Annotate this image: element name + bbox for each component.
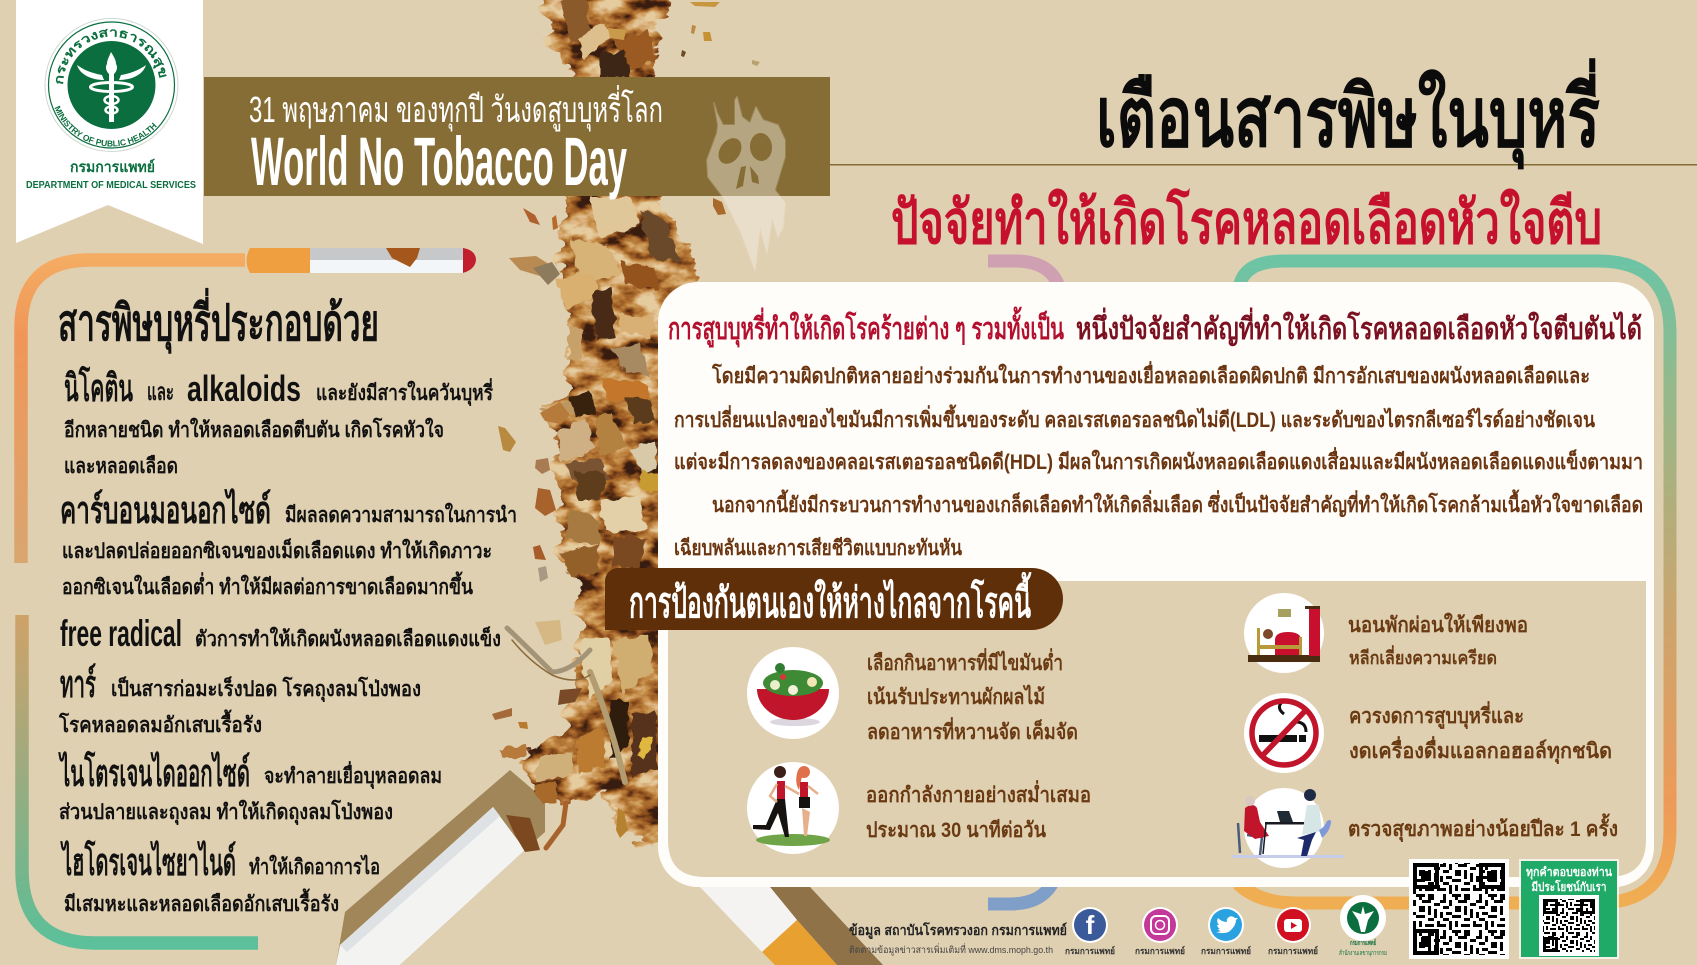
tip text: diet: เลือกกินอาหารที่มีไขมันต่ำ (867, 647, 1063, 675)
item: carbon monoxide: คาร์บอนมอนอกไซด์ (60, 488, 271, 532)
icon: ghost skull smoke (707, 97, 785, 270)
item: nicotine (64, 365, 494, 478)
item: free radical: ตัวการทำให้เกิดผนังหลอดเลือดแดงแข็ง (195, 625, 501, 651)
panel: heart disease explanation card (658, 282, 1654, 887)
icon: youtube: กรมการแพทย์ (1268, 945, 1318, 956)
tip text: exercise (866, 779, 1091, 842)
icon: department seal (1339, 895, 1387, 957)
scattered tobacco flakes (492, 2, 760, 852)
icon: facebook: กรมการแพทย์ (1065, 945, 1115, 956)
icon: instagram (1135, 907, 1185, 956)
source credit: ข้อมูล สถาบันโรคทรวงอก กรมการแพทย์ (849, 921, 1067, 939)
QR code: feedback panel: มีประโยชน์กับเรา (1532, 879, 1606, 894)
ministry emblem: MINISTRY OF PUBLIC HEALTH (54, 106, 157, 146)
tip: quit smoking (1244, 693, 1612, 773)
logo ribbon: DEPARTMENT OF MEDICAL SERVICES (26, 180, 196, 191)
header rule (830, 164, 1697, 166)
item: hydrogen cyanide: ไฮโดรเจนไซยาไนด์ (60, 839, 236, 884)
tip text: health check: ตรวจสุขภาพอย่างน้อยปีละ 1 ครั้ง (1348, 813, 1618, 843)
item: hydrogen cyanide: มีเสมหะและหลอดเลือดอักเสบเรื้อรัง (64, 888, 339, 916)
tip text: quit smoking: งดเครื่องดื่มแอลกอฮอล์ทุกชนิด (1349, 735, 1612, 765)
item: nicotine: และหลอดเลือด (64, 454, 178, 478)
card heading (668, 306, 1642, 348)
tip text: quit smoking (1349, 700, 1612, 765)
icon: no smoking (1244, 693, 1324, 773)
prevention heading pill: การป้องกันตนเองให้ห่างไกลจากโรคนี้ (629, 571, 1032, 626)
item: nicotine: นิโคติน (64, 365, 133, 410)
icon: department seal: สำนักงานเลขานุการกรม (1339, 949, 1387, 957)
left panel text (58, 288, 517, 916)
item: hydrogen cyanide: ทำให้เกิดอาการไอ (249, 854, 380, 879)
icon: doctor consultation (1232, 788, 1344, 868)
banner English title: World No Tobacco Day (251, 123, 627, 200)
icon: sleeping in bed (1244, 593, 1324, 673)
icon: runners (747, 762, 839, 854)
QR code: main (1409, 859, 1509, 959)
department name: กรมการแพทย์ (70, 158, 155, 176)
item: nicotine: และยังมีสารในควันบุหรี่ (316, 377, 494, 407)
tip text: exercise: ออกกำลังกายอย่างสม่ำเสมอ (866, 779, 1091, 807)
item: nitrogen dioxide: ไนโตรเจนไดออกไซด์ (58, 750, 250, 795)
icon: salad bowl (747, 647, 839, 739)
source credit: ติดตามข้อมูลข่าวสารเพิ่มเติมที่ www.dms.moph.go.th (849, 943, 1053, 956)
icon: instagram: กรมการแพทย์ (1135, 945, 1185, 956)
icon: facebook (1065, 907, 1115, 956)
lower-left cigarette (336, 770, 545, 965)
source credit (849, 921, 1067, 956)
tobacco stems (507, 628, 625, 848)
item: nicotine: และ (147, 379, 174, 406)
left panel outline (21, 260, 258, 943)
tip text: diet (867, 647, 1078, 744)
left panel heading: สารพิษบุหรี่ประกอบด้วย (58, 288, 379, 354)
item: nitrogen dioxide: ส่วนปลายและถุงลม ทำให้เกิดถุงลมโป่งพอง (59, 799, 393, 826)
icon: facebook: f (1086, 910, 1095, 940)
QR code: feedback panel: ทุกคำตอบของท่าน (1526, 865, 1613, 880)
icon: youtube (1268, 907, 1318, 956)
top cigarette (246, 248, 476, 273)
ministry emblem (44, 18, 178, 152)
card body text: โดยมีความผิดปกติหลายอย่างร่วมกันในการทำงานของเยื่อหลอดเลือดผิดปกติ มีการอักเสบของผนังหลอดเลือดและ (711, 360, 1590, 388)
tip text: rest: หลีกเลี่ยงความเครียด (1349, 645, 1497, 668)
item: nicotine: อีกหลายชนิด ทำให้หลอดเลือดตีบตัน เกิดโรคหัวใจ (64, 417, 444, 442)
card body text: เฉียบพลันและการเสียชีวิตแบบกะทันหัน (674, 536, 963, 560)
item: carbon monoxide: ออกซิเจนในเลือดต่ำ ทำให้มีผลต่อการขาดเลือดมากขึ้น (62, 571, 474, 599)
tip: rest (1244, 593, 1528, 673)
tip: health check (1232, 788, 1618, 868)
tip text: diet: เน้นรับประทานผักผลไม้ (867, 684, 1045, 709)
item: carbon monoxide: และปลดปล่อยออกซิเจนของเม็ดเลือดแดง ทำให้เกิดภาวะ (62, 537, 492, 563)
item: hydrogen cyanide (60, 839, 380, 916)
item: tar: ทาร์ (60, 663, 96, 706)
tip text: rest (1348, 612, 1528, 668)
item: tar (58, 663, 421, 737)
icon: department seal: กรมการแพทย์ (1350, 938, 1376, 947)
item: carbon monoxide: มีผลลดความสามารถในการนำ (285, 502, 517, 527)
lower-right cigarette with filter (700, 887, 883, 965)
item: free radical: free radical (60, 613, 182, 654)
header banner (204, 77, 830, 200)
tip: exercise (747, 762, 1091, 854)
item: nitrogen dioxide (58, 750, 442, 826)
banner date line: 31 พฤษภาคม ของทุกปี วันงดสูบบุหรี่โลก (249, 85, 663, 132)
tip text: diet: ลดอาหารที่หวานจัด เค็มจัด (867, 716, 1078, 744)
item: tar: เป็นสารก่อมะเร็งปอด โรคถุงลมโป่งพอง (111, 675, 421, 703)
icon: twitter (1201, 907, 1251, 956)
logo ribbon (16, 0, 203, 244)
card heading: การสูบบุหรี่ทำให้เกิดโรคร้ายต่าง ๆ รวมทั้งเป็น (668, 306, 1064, 348)
tip text: rest: นอนพักผ่อนให้เพียงพอ (1348, 612, 1528, 637)
prevention heading pill (605, 568, 1063, 630)
social media icons (1065, 895, 1387, 957)
tip: healthy diet (747, 647, 1078, 744)
card body text (674, 360, 1643, 560)
QR code: feedback panel (1519, 859, 1619, 959)
tobacco leaves column (492, 0, 760, 852)
item: free radical (60, 613, 501, 654)
ministry emblem: กระทรวงสาธารณสุข (56, 28, 167, 84)
item: nitrogen dioxide: จะทำลายเยื่อบุหลอดลม (264, 760, 442, 790)
icon: twitter: กรมการแพทย์ (1201, 945, 1251, 956)
item: carbon monoxide (60, 488, 517, 599)
tip text: quit smoking: ควรงดการสูบบุหรี่และ (1349, 700, 1524, 730)
item: tar: โรคหลอดลมอักเสบเรื้อรัง (58, 709, 262, 737)
item: nicotine: alkaloids (187, 368, 301, 409)
leaf shapes over texture (500, 0, 680, 805)
tip text: exercise: ประมาณ 30 นาทีต่อวัน (866, 818, 1047, 842)
right panel ring decorations (988, 261, 1670, 904)
